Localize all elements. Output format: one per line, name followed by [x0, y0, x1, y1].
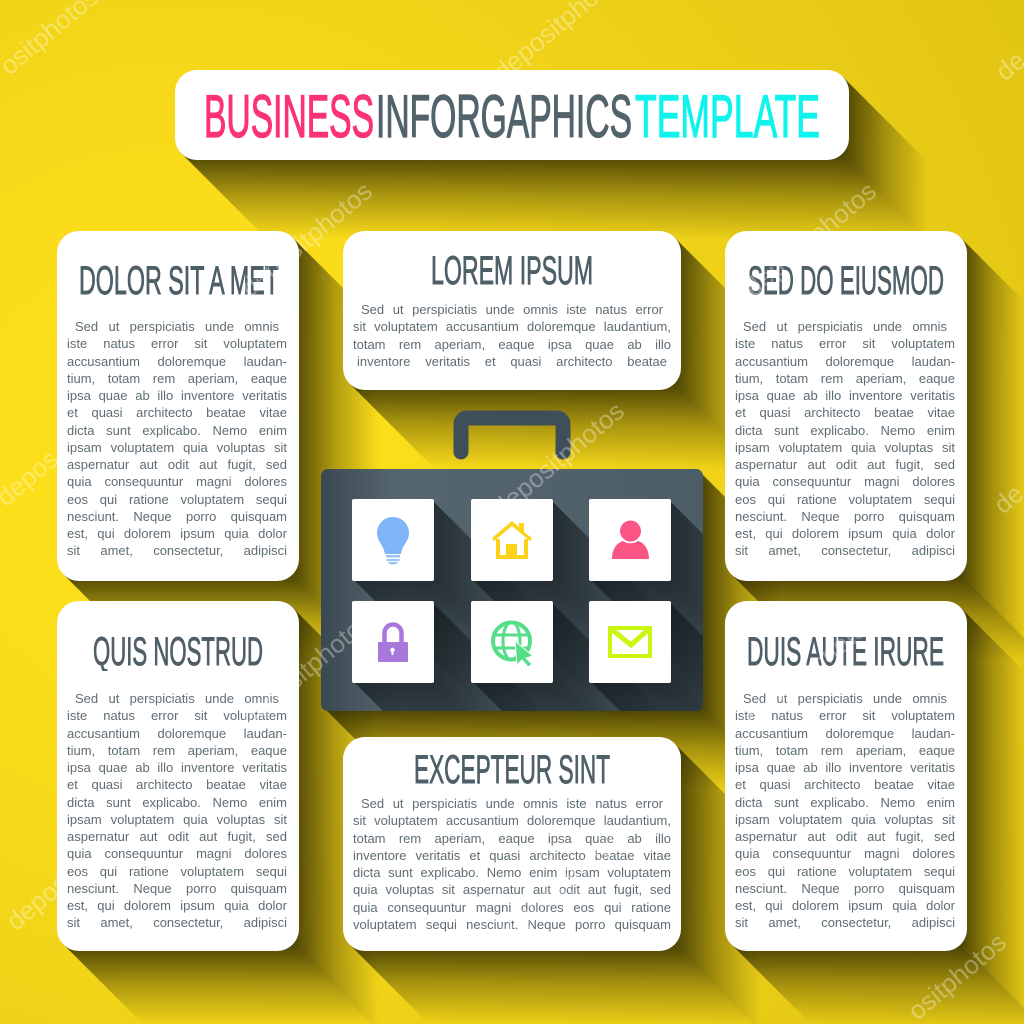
panel: duis aute irure: [725, 601, 967, 951]
panel: excepteur sint: [343, 737, 681, 951]
body text: est, qui dolorem ipsum quia dolor: [67, 526, 287, 541]
body text: sit amet, consectetur, adipisci: [67, 543, 287, 558]
body text: ipsa quae ab illo inventore veritatis: [67, 760, 287, 775]
body text: nesciunt. Neque porro quisquam: [735, 881, 955, 896]
tile: globe with cursor icon: [471, 601, 553, 683]
body text: aspernatur aut odit aut fugit, sed: [67, 829, 287, 844]
body text: tium, totam rem aperiam, eaque: [67, 743, 287, 758]
body text: est, qui dolorem ipsum quia dolor: [735, 898, 955, 913]
body text: sit amet, consectetur, adipisci: [67, 915, 287, 930]
watermarks: ositphotos: [902, 927, 1012, 1024]
tile: envelope icon: [589, 601, 671, 683]
body text: inventore veritatis et quasi architecto beatae vitae: [353, 848, 671, 863]
body text: sit voluptatem accusantium doloremque laudantium,: [353, 319, 671, 334]
body text: ipsam voluptatem quia voluptas sit: [735, 812, 955, 827]
watermarks: depositphotos: [487, 396, 630, 523]
title word: INFORGRAPHICS: INFORGAPHICS: [376, 83, 632, 150]
body text: dicta sunt explicabo. Nemo enim ipsam voluptatem: [353, 865, 671, 880]
body text: accusantium doloremque laudan-: [735, 354, 955, 369]
watermarks: depositphotos: [235, 606, 378, 733]
body text: dicta sunt explicabo. Nemo enim: [67, 423, 287, 438]
body text: dicta sunt explicabo. Nemo enim: [735, 423, 955, 438]
body text: aspernatur aut odit aut fugit, sed: [735, 457, 955, 472]
body text: quia consequuntur magni dolores: [67, 846, 287, 861]
panel: dolor sit a met: [57, 231, 299, 581]
body text: totam rem aperiam, eaque ipsa quae ab illo: [353, 831, 671, 846]
body text: iste natus error sit voluptatem: [735, 336, 955, 351]
briefcase handle: [461, 418, 563, 452]
body text: tium, totam rem aperiam, eaque: [67, 371, 287, 386]
panel: quis nostrud: [57, 601, 299, 951]
body text: tium, totam rem aperiam, eaque: [735, 371, 955, 386]
body text: eos qui ratione voluptatem sequi: [735, 864, 955, 879]
body text: eos qui ratione voluptatem sequi: [735, 492, 955, 507]
body text: quia consequuntur magni dolores: [735, 846, 955, 861]
body text: ipsa quae ab illo inventore veritatis: [67, 388, 287, 403]
watermarks: depositphotos: [487, 823, 630, 950]
briefcase body: [321, 469, 703, 711]
panel: lorem ipsum: [343, 231, 681, 390]
body text: eos qui ratione voluptatem sequi: [67, 864, 287, 879]
tile: light bulb icon: [352, 499, 434, 581]
body text: tium, totam rem aperiam, eaque: [735, 743, 955, 758]
tile long shadows: [355, 502, 703, 711]
body text: [353, 302, 671, 369]
body text: sit voluptatem accusantium doloremque laudantium,: [353, 813, 671, 828]
body text: iste natus error sit voluptatem: [735, 708, 955, 723]
body text: ipsam voluptatem quia voluptas sit: [67, 812, 287, 827]
body text: Sed ut perspiciatis unde omnis: [75, 319, 279, 334]
tile: padlock icon: [352, 601, 434, 683]
body text: nesciunt. Neque porro quisquam: [67, 881, 287, 896]
body text: ipsam voluptatem quia voluptas sit: [67, 440, 287, 455]
briefcase illustration: [321, 410, 703, 711]
body text: dicta sunt explicabo. Nemo enim: [67, 795, 287, 810]
body text: ipsa quae ab illo inventore veritatis: [735, 760, 955, 775]
body text: totam rem aperiam, eaque ipsa quae ab illo: [353, 337, 671, 352]
body text: voluptatem sequi nesciunt. Neque porro quisquam: [353, 917, 671, 932]
body text: [353, 796, 671, 932]
body text: aspernatur aut odit aut fugit, sed: [67, 457, 287, 472]
body text: iste natus error sit voluptatem: [67, 336, 287, 351]
title banner: [175, 70, 849, 160]
body text: aspernatur aut odit aut fugit, sed: [735, 829, 955, 844]
body text: ipsam voluptatem quia voluptas sit: [735, 440, 955, 455]
body text: [67, 691, 287, 930]
watermarks: depos: [0, 868, 74, 936]
body text: accusantium doloremque laudan-: [67, 726, 287, 741]
tile: house icon: [471, 499, 553, 581]
watermarks: depositphotos: [739, 176, 882, 303]
watermarks: depositphotos: [739, 606, 882, 733]
tile: person icon: [589, 499, 671, 581]
body text: sit amet, consectetur, adipisci: [735, 543, 955, 558]
body text: quia voluptas sit aspernatur aut odit aut fugit, sed: [353, 882, 671, 897]
body text: nesciunt. Neque porro quisquam: [735, 509, 955, 524]
body text: Sed ut perspiciatis unde omnis: [75, 691, 279, 706]
body text: ipsa quae ab illo inventore veritatis: [735, 388, 955, 403]
body text: quia consequuntur magni dolores eos qui ratione: [353, 900, 671, 915]
body text: accusantium doloremque laudan-: [735, 726, 955, 741]
body text: iste natus error sit voluptatem: [67, 708, 287, 723]
body text: est, qui dolorem ipsum quia dolor: [67, 898, 287, 913]
body text: quia consequuntur magni dolores: [67, 474, 287, 489]
body text: Sed ut perspiciatis unde omnis iste natus error: [361, 796, 663, 811]
body text: Sed ut perspiciatis unde omnis: [743, 691, 947, 706]
body text: dicta sunt explicabo. Nemo enim: [735, 795, 955, 810]
watermarks: depositphotos: [235, 176, 378, 303]
body text: eos qui ratione voluptatem sequi: [67, 492, 287, 507]
body text: quia consequuntur magni dolores: [735, 474, 955, 489]
body text: [735, 691, 955, 930]
body text: et quasi architecto beatae vitae: [735, 777, 955, 792]
body text: accusantium doloremque laudan-: [67, 354, 287, 369]
panel: sed do eiusmod: [725, 231, 967, 581]
title word: BUSINESS: BUSINESS: [204, 83, 374, 150]
body text: et quasi architecto beatae vitae: [735, 405, 955, 420]
body text: nesciunt. Neque porro quisquam: [67, 509, 287, 524]
body text: et quasi architecto beatae vitae: [67, 777, 287, 792]
body text: est, qui dolorem ipsum quia dolor: [735, 526, 955, 541]
body text: Sed ut perspiciatis unde omnis: [743, 319, 947, 334]
body text: inventore veritatis et quasi architecto beatae: [357, 354, 667, 369]
body text: Sed ut perspiciatis unde omnis iste natus error: [361, 302, 663, 317]
body text: [67, 319, 287, 558]
body text: sit amet, consectetur, adipisci: [735, 915, 955, 930]
body text: [735, 319, 955, 558]
body text: et quasi architecto beatae vitae: [67, 405, 287, 420]
